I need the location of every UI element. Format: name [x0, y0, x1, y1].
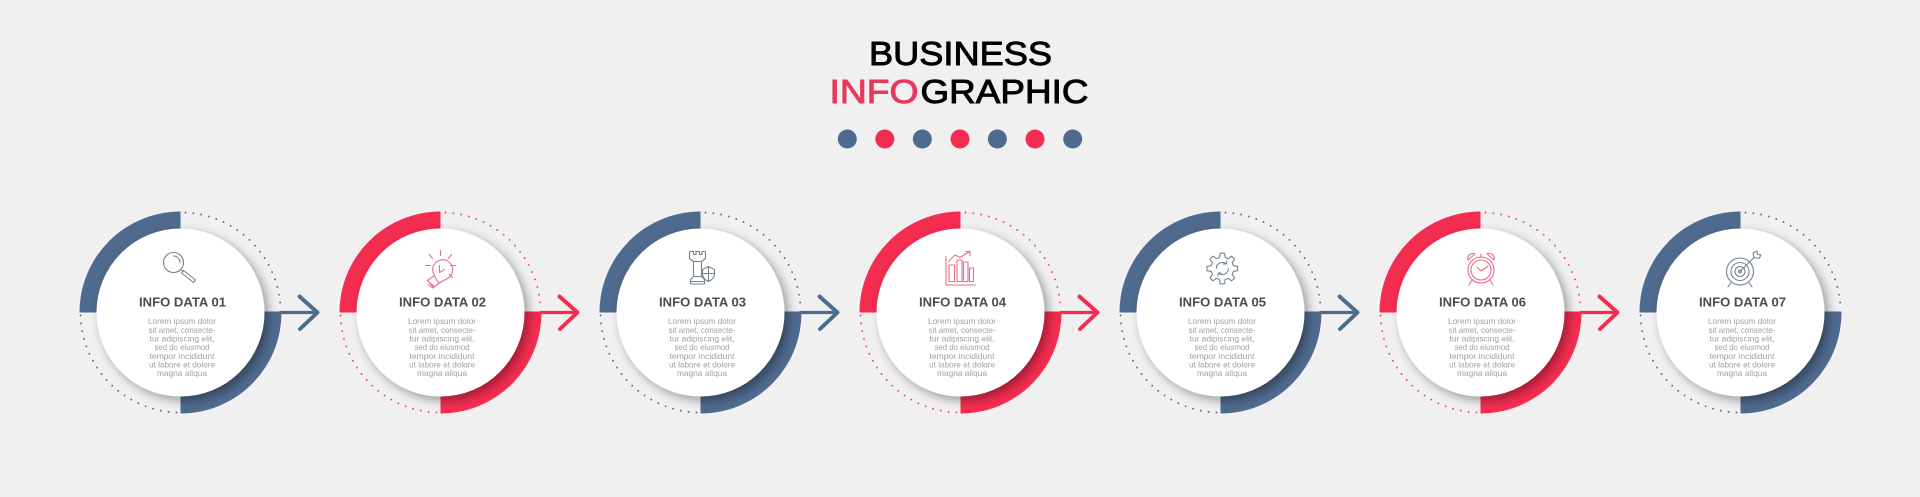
- panel: step 06: [1380, 212, 1618, 414]
- heading: INFO DATA 07: [1699, 294, 1786, 310]
- text block: tempor incididunt: [1710, 352, 1775, 361]
- text block: sed do eiusmod: [414, 343, 470, 352]
- text block: magna aliqua: [1717, 369, 1767, 378]
- text block: sit amet, consecte-: [928, 326, 996, 335]
- panel: step 02: [340, 212, 578, 414]
- icon: magnifier: [164, 252, 196, 282]
- text block: tur adipiscing elit,: [1190, 334, 1254, 344]
- heading: INFO DATA 01: [139, 294, 226, 310]
- text block: tur adipiscing elit,: [930, 334, 994, 344]
- text block: sed do eiusmod: [1194, 343, 1250, 352]
- text block: sed do eiusmod: [1454, 343, 1510, 352]
- text block: [408, 317, 476, 378]
- panel: step 03: [600, 212, 838, 414]
- icon: bar chart: [946, 252, 976, 285]
- text block: ut labore et dolore: [1709, 360, 1775, 369]
- text block: Lorem ipsum dolor: [148, 317, 216, 326]
- panel: step 01: [80, 212, 318, 414]
- arrow: [800, 296, 838, 329]
- title: INFO: [830, 73, 918, 110]
- text block: sit amet, consecte-: [1188, 326, 1256, 335]
- title: GRAPHIC: [920, 73, 1088, 110]
- text block: Lorem ipsum dolor: [1188, 317, 1256, 326]
- text block: sit amet, consecte-: [148, 326, 216, 335]
- text block: Lorem ipsum dolor: [668, 317, 736, 326]
- text block: tur adipiscing elit,: [410, 334, 474, 344]
- arrow: [540, 296, 578, 329]
- icon: light bulb: [426, 250, 456, 288]
- text block: sit amet, consecte-: [1448, 326, 1516, 335]
- title: BUSINESS: [869, 35, 1052, 72]
- heading: INFO DATA 03: [659, 294, 746, 310]
- text block: sed do eiusmod: [154, 343, 210, 352]
- panel: step 07: [1640, 212, 1842, 414]
- text block: Lorem ipsum dolor: [408, 317, 476, 326]
- text block: sed do eiusmod: [934, 343, 990, 352]
- text block: [928, 317, 996, 378]
- text block: magna aliqua: [1457, 369, 1507, 378]
- text block: ut labore et dolore: [669, 360, 735, 369]
- text block: Lorem ipsum dolor: [928, 317, 996, 326]
- arrow: [1060, 296, 1098, 329]
- arrow: [1580, 296, 1618, 329]
- text block: sit amet, consecte-: [1708, 326, 1776, 335]
- heading: INFO DATA 04: [919, 294, 1007, 310]
- text block: Lorem ipsum dolor: [1708, 317, 1776, 326]
- text block: magna aliqua: [417, 369, 467, 378]
- text block: tempor incididunt: [150, 352, 215, 361]
- text block: tempor incididunt: [930, 352, 995, 361]
- text block: tur adipiscing elit,: [1450, 334, 1514, 344]
- heading: INFO DATA 06: [1439, 294, 1526, 310]
- text block: ut labore et dolore: [409, 360, 475, 369]
- text block: magna aliqua: [1197, 369, 1247, 378]
- text block: tempor incididunt: [1190, 352, 1255, 361]
- heading: INFO DATA 05: [1179, 294, 1266, 310]
- title: [830, 35, 1088, 110]
- icon: chess rook and shield: [690, 252, 714, 284]
- icon: alarm clock: [1468, 253, 1494, 285]
- panel: step 05: [1120, 212, 1358, 414]
- text block: magna aliqua: [937, 369, 987, 378]
- icon: gear: [1207, 253, 1238, 284]
- text block: tempor incididunt: [410, 352, 475, 361]
- text block: ut labore et dolore: [149, 360, 215, 369]
- text block: magna aliqua: [677, 369, 727, 378]
- heading: INFO DATA 02: [399, 294, 486, 310]
- text block: ut labore et dolore: [1449, 360, 1515, 369]
- icon: target: [1726, 251, 1761, 287]
- arrow: [280, 296, 318, 329]
- text block: sed do eiusmod: [674, 343, 730, 352]
- text block: tur adipiscing elit,: [670, 334, 734, 344]
- text block: sed do eiusmod: [1714, 343, 1770, 352]
- arrow: [1320, 296, 1358, 329]
- text block: magna aliqua: [157, 369, 207, 378]
- panel: step 04: [860, 212, 1098, 414]
- text block: sit amet, consecte-: [408, 326, 476, 335]
- text block: ut labore et dolore: [1189, 360, 1255, 369]
- dot row: [838, 130, 1082, 148]
- text block: tur adipiscing elit,: [150, 334, 214, 344]
- text block: tempor incididunt: [1450, 352, 1515, 361]
- text block: sit amet, consecte-: [668, 326, 736, 335]
- text block: [148, 317, 216, 378]
- text block: [1708, 317, 1776, 378]
- text block: [1448, 317, 1516, 378]
- text block: Lorem ipsum dolor: [1448, 317, 1516, 326]
- text block: [1188, 317, 1256, 378]
- text block: [668, 317, 736, 378]
- text block: tempor incididunt: [670, 352, 735, 361]
- text block: ut labore et dolore: [929, 360, 995, 369]
- text block: tur adipiscing elit,: [1710, 334, 1774, 344]
